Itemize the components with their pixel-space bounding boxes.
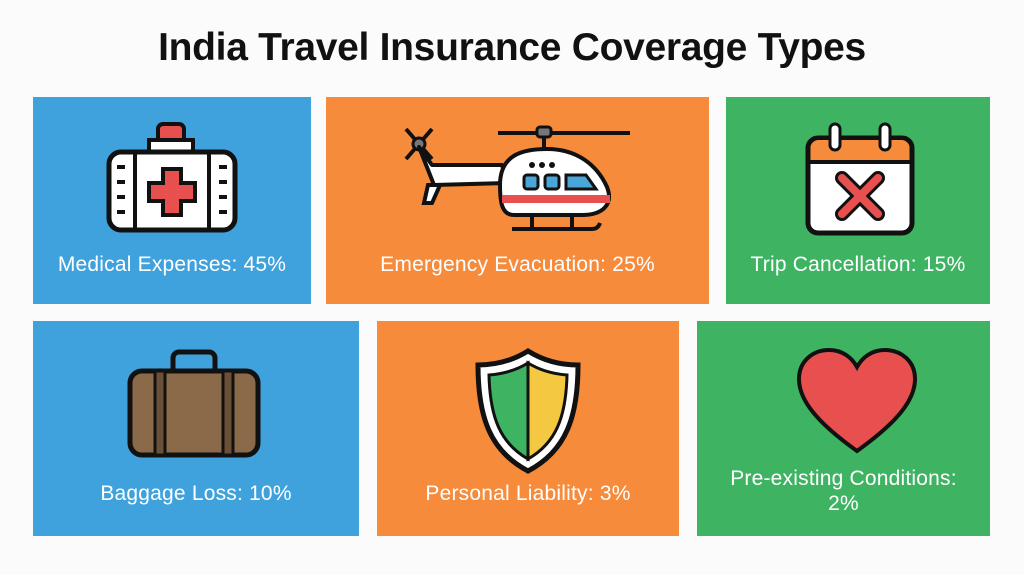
panel: emergency evacuation: [326, 97, 709, 304]
panel: personal liability: [377, 321, 679, 536]
label: Baggage Loss: 10%: [100, 482, 292, 505]
label: [730, 467, 957, 515]
label: Trip Cancellation: 15%: [751, 253, 965, 276]
panel: trip cancellation: [726, 97, 990, 304]
panel: pre-existing conditions: [697, 321, 990, 536]
icon: shield: [476, 348, 580, 474]
icon: first aid kit: [106, 122, 238, 232]
panel: medical expenses: [33, 97, 311, 304]
label: Pre-existing Conditions:: [730, 467, 957, 490]
label: Personal Liability: 3%: [425, 482, 631, 505]
icon: heart: [797, 348, 917, 454]
icon: suitcase: [128, 350, 260, 458]
icon: helicopter: [404, 126, 630, 231]
icon: calendar with x: [806, 122, 914, 236]
panel: baggage loss: [33, 321, 359, 536]
label: Emergency Evacuation: 25%: [380, 253, 655, 276]
title: India Travel Insurance Coverage Types: [158, 26, 866, 69]
label: 2%: [828, 492, 859, 515]
label: Medical Expenses: 45%: [58, 253, 286, 276]
